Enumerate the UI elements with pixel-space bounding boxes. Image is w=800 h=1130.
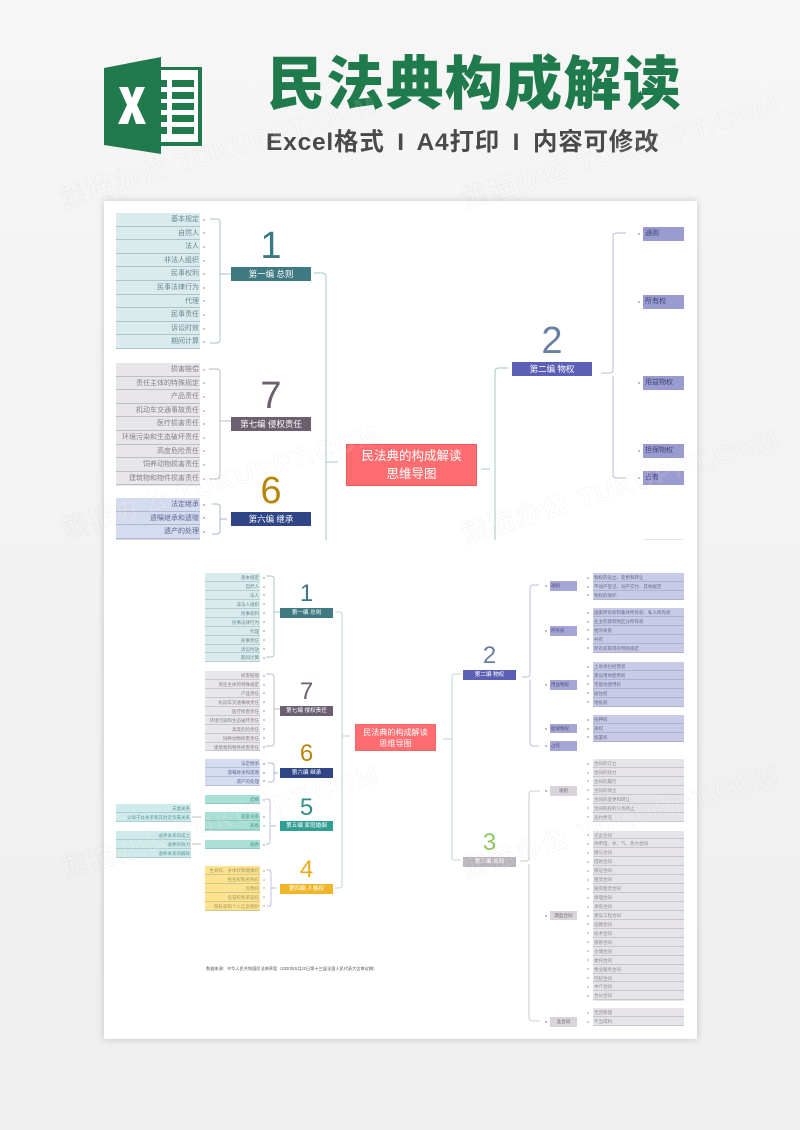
- upper property sub-topics: [638, 227, 684, 485]
- list: security: 质权: [594, 726, 603, 731]
- list: typical contracts: 保理合同: [594, 895, 612, 900]
- list: security: 抵押权: [594, 717, 608, 722]
- list: adoption detail: 收养关系的解除: [158, 851, 190, 856]
- list: usufruct: 建设用地使用权: [594, 673, 626, 678]
- list: upper general provisions: 民事权利: [171, 270, 199, 277]
- list: family relations and divorce: [205, 812, 260, 831]
- list: upper general provisions: 民事法律行为: [157, 284, 199, 291]
- sub-topic: general: [550, 581, 577, 590]
- sub-topic: contract general: [550, 786, 577, 796]
- sub-topic: security: [643, 444, 684, 458]
- list: upper general provisions: 非法人组织: [164, 257, 199, 264]
- heading: book four: 第四编 人格权: [289, 886, 324, 892]
- list: typical contracts: 行纪合同: [594, 976, 612, 980]
- list: lower tort liability: [205, 671, 260, 751]
- sub-topic: security: 担保物权: [551, 726, 569, 730]
- heading: lower book seven: [280, 706, 333, 716]
- list: ownership: 共有: [594, 637, 603, 642]
- list: contract general: 合同的变更和转让: [594, 797, 630, 802]
- heading: lower book seven: 第七编 侵权责任: [286, 708, 327, 714]
- list: contract general: 合同的订立: [594, 761, 616, 766]
- sub-topic: ownership: [643, 295, 684, 309]
- list: family relations and divorce: 家庭关系: [241, 814, 259, 819]
- list: contract general: 违约责任: [594, 815, 612, 820]
- list: security: [593, 715, 684, 742]
- heading: book five: 第五编 家庭婚姻: [286, 823, 327, 829]
- list: lower general provisions: 民事法律行为: [232, 620, 259, 625]
- lower property sub-topics: [545, 581, 577, 751]
- list: adoption detail: [116, 831, 191, 858]
- list: property general: 不动产登记、动产交付、其他规定: [594, 584, 662, 589]
- list: upper tort liability: [116, 363, 200, 486]
- sub-topic: possession: 占有: [551, 743, 560, 748]
- list: contract general: 合同的权利义务终止: [594, 806, 634, 811]
- list: upper general provisions: 基本规定: [171, 216, 199, 223]
- list: lower general provisions: 自然人: [246, 584, 259, 589]
- number 4: 4: [300, 856, 313, 883]
- list: upper tort liability: 饲养动物损害责任: [143, 461, 199, 468]
- heading: lower book two: 第二编 物权: [475, 672, 504, 678]
- sub-topic: possession: [643, 471, 684, 485]
- list: ownership: 国家所有权和集体所有权、私人所有权: [594, 610, 670, 615]
- list: ownership: [593, 608, 684, 653]
- list: typical contracts: 建设工程合同: [594, 913, 621, 918]
- list: contract general: [593, 759, 684, 822]
- source note: 数据来源：中华人民共和国民法典草案（2020年5月22日第十三届全国人民代表大会审议稿）: [206, 966, 377, 971]
- list: personality rights: 肖像权: [246, 886, 259, 891]
- list: lower general provisions: 期间计算: [241, 655, 259, 660]
- watermarks: 熊猫办公 TUKUPPT.COM: [58, 759, 383, 884]
- list: lower tort liability: 医疗损害责任: [232, 709, 259, 714]
- list: ownership: 所有权取得的特别规定: [594, 646, 639, 651]
- sub-topic: contract general: 通则: [559, 788, 568, 793]
- list: family relations and divorce: 离婚: [250, 823, 259, 828]
- list: typical contracts: 保证合同: [594, 868, 612, 873]
- list: upper tort liability: 责任主体的特殊规定: [136, 380, 199, 387]
- list: contract general: 合同的效力: [594, 770, 616, 775]
- number 7: 7: [260, 375, 282, 417]
- list: upper tort liability: 机动车交通事故责任: [136, 407, 199, 414]
- list: usufruct: [593, 662, 684, 707]
- list: upper succession: [116, 498, 200, 540]
- list: personality rights: 生命权、身体权和健康权: [210, 868, 259, 873]
- heading: book seven: [231, 417, 311, 431]
- sub-topic: usufruct: [550, 680, 577, 690]
- list: upper succession: 法定继承: [171, 501, 199, 508]
- list: personality rights: 姓名权和名称权: [228, 877, 259, 882]
- list: upper tort liability: 医疗损害责任: [157, 420, 199, 427]
- lower map trunk connectors: [335, 612, 461, 888]
- heading: book one: 第一编 总则: [249, 269, 293, 279]
- list: typical contracts: 合伙合同: [594, 993, 612, 998]
- list: upper tort liability: 环境污染和生态破坏责任: [122, 434, 199, 441]
- heading: book three: 第三编 合同: [475, 859, 504, 865]
- list: security: 留置权: [594, 735, 608, 740]
- list: lower general provisions: [205, 573, 260, 662]
- list: adoption: [205, 840, 260, 849]
- list: lower succession: 遗嘱继承和遗赠: [228, 770, 259, 775]
- list: lower tort liability: 饲养动物损害责任: [223, 736, 259, 741]
- list: upper general provisions: 法人: [185, 243, 199, 250]
- list: contract general: 合同的保全: [594, 788, 616, 793]
- sub-topic: usufruct: [643, 376, 684, 390]
- list: upper general provisions: 期间计算: [171, 338, 199, 345]
- watermarks: 熊猫办公 TUKUPPT.COM: [458, 759, 783, 884]
- list: personality rights: 隐私权和个人信息保护: [214, 904, 259, 909]
- sub-topic: possession: 占有: [645, 474, 659, 481]
- list: personality rights: [205, 866, 260, 911]
- sub-topic: typical contracts: [550, 910, 577, 920]
- heading: book three: [463, 857, 516, 866]
- central topic upper: 民法典的构成解读: [361, 449, 462, 463]
- list: lower general provisions: 非法人组织: [236, 602, 259, 607]
- list: ownership: 业主的建筑物区分所有权: [594, 619, 644, 624]
- title: 民法典构成解读: [267, 52, 682, 117]
- sub-topic: quasi contracts: 准合同: [557, 1019, 570, 1024]
- subtitle: Excel格式 I A4打印 I 内容可修改: [266, 129, 659, 156]
- number 6: 6: [260, 470, 282, 512]
- list: usufruct: 土地承包经营权: [594, 664, 626, 669]
- list: upper general provisions: 代理: [185, 298, 199, 305]
- list: adoption: 收养: [250, 842, 259, 847]
- list: upper tort liability: 高度危险责任: [157, 448, 199, 455]
- list: adoption detail: 收养的效力: [168, 842, 190, 847]
- central topic lower: [355, 724, 436, 751]
- list: lower tort liability: 产品责任: [241, 691, 259, 696]
- number 2: 2: [541, 320, 563, 362]
- heading: book one: [231, 267, 311, 281]
- list: lower succession: [205, 759, 260, 786]
- list: lower general provisions: 诉讼时效: [241, 646, 259, 652]
- list: quasi contracts: 不当得利: [594, 1019, 612, 1024]
- list: lower general provisions: 民事权利: [241, 611, 259, 616]
- sub-topic: possession: [550, 741, 577, 750]
- list: typical contracts: 买卖合同: [594, 832, 612, 838]
- list: usufruct: 地役权: [594, 700, 608, 705]
- heading: book six: [231, 512, 311, 526]
- list: typical contracts: 中介合同: [594, 984, 612, 989]
- list: marriage: [205, 795, 260, 804]
- list: typical contracts: [593, 830, 684, 1000]
- list: upper succession: 遗产的处理: [164, 528, 199, 535]
- list: personality rights: 名誉权和荣誉权: [228, 895, 259, 900]
- list: upper general provisions: 诉讼时效: [171, 325, 199, 332]
- central topic upper: 思维导图: [386, 467, 436, 481]
- divider stub upper: [643, 539, 684, 540]
- list: typical contracts: 委托合同: [594, 958, 612, 963]
- heading: lower book six: 第六编 继承: [292, 770, 321, 776]
- sub-topic: ownership: [550, 626, 577, 636]
- list: typical contracts: 融资租赁合同: [594, 886, 621, 891]
- central topic lower: 思维导图: [379, 739, 412, 748]
- heading: lower book one: 第一编 总则: [292, 610, 321, 616]
- list: marriage: 结婚: [250, 797, 259, 802]
- list: usufruct: 居住权: [594, 691, 608, 696]
- sub-topic: usufruct: 用益物权: [645, 379, 673, 386]
- list: typical contracts: 赠与合同: [594, 850, 612, 855]
- list: lower tort liability: 建筑物和物件损害责任: [214, 744, 259, 750]
- sub-topic: usufruct: 用益物权: [551, 682, 569, 687]
- list: lower general provisions: 法人: [250, 593, 259, 598]
- upper map trunk connectors: [314, 273, 508, 540]
- number 3: 3: [483, 829, 496, 856]
- list: upper general provisions: 自然人: [178, 230, 199, 237]
- number 7 lower: 7: [300, 678, 313, 705]
- sub-topic: general: 通则: [551, 583, 560, 588]
- list: lower succession: 法定继承: [241, 761, 259, 766]
- list: upper succession: 遗嘱继承和遗赠: [150, 515, 199, 522]
- list: typical contracts: 租赁合同: [594, 877, 612, 882]
- heading: lower book one: [280, 608, 333, 618]
- heading: lower book two: [463, 670, 516, 680]
- watermarks: 熊猫办公 TUKUPPT.COM: [56, 89, 381, 214]
- list: family relations detail: 父母子女关系和其他近亲属关系: [127, 815, 190, 820]
- heading: book five: [280, 821, 333, 830]
- list: quasi contracts: 无因管理: [594, 1010, 612, 1015]
- list: upper tort liability: 产品责任: [171, 393, 199, 400]
- list: usufruct: 宅基地使用权: [594, 682, 621, 687]
- sub-topic: quasi contracts: [550, 1017, 577, 1026]
- list: typical contracts: 供用电、水、气、热力合同: [594, 841, 648, 846]
- heading: book two: 第二编 物权: [530, 364, 574, 374]
- list: lower tort liability: 损害赔偿: [241, 673, 259, 678]
- list: lower tort liability: 责任主体的特殊规定: [218, 682, 259, 687]
- lower map branch brackets: [192, 576, 540, 1021]
- list: property general: [593, 573, 684, 600]
- list: upper general provisions: [116, 213, 200, 349]
- sub-topic: general: 通则: [645, 230, 659, 237]
- number 6 lower: 6: [300, 740, 313, 767]
- number 2 lower: 2: [483, 642, 496, 669]
- heading: lower book six: [280, 768, 333, 778]
- list: lower tort liability: 机动车交通事故责任: [218, 700, 259, 705]
- list: typical contracts: 借款合同: [594, 859, 612, 864]
- list: typical contracts: 承揽合同: [594, 904, 612, 909]
- sub-topic: typical contracts: 典型合同: [554, 912, 572, 918]
- panel: white sheet: [104, 201, 697, 1039]
- number 5: 5: [300, 794, 313, 821]
- list: typical contracts: 技术合同: [594, 931, 612, 936]
- watermarks: 熊猫办公 TUKUPPT.COM: [58, 419, 383, 544]
- heading: book seven: 第七编 侵权责任: [240, 419, 302, 429]
- list: contract general: 合同的履行: [594, 779, 616, 784]
- central topic upper: [346, 444, 477, 486]
- list: lower tort liability: 环境污染和生态破坏责任: [210, 718, 259, 723]
- list: lower general provisions: 民事责任: [241, 638, 259, 643]
- sub-topic: security: 担保物权: [645, 447, 673, 454]
- sub-topic: ownership: 所有权: [551, 628, 564, 633]
- list: family relations detail: 夫妻关系: [172, 806, 190, 811]
- heading: book six: 第六编 继承: [249, 514, 293, 524]
- heading: book two: [512, 362, 592, 376]
- list: upper tort liability: 损害赔偿: [171, 366, 199, 373]
- list: typical contracts: 保管合同: [594, 940, 612, 945]
- list: lower tort liability: 高度危险责任: [232, 727, 259, 732]
- number 1: 1: [260, 225, 282, 267]
- sub-topic: security: [550, 724, 577, 733]
- list: family relations detail: [116, 804, 191, 822]
- heading: book four: [280, 884, 333, 894]
- list: typical contracts: 物业服务合同: [594, 967, 621, 972]
- central topic lower: 民法典的构成解读: [363, 728, 428, 736]
- list: typical contracts: 仓储合同: [594, 949, 612, 954]
- sub-topic: general: [643, 227, 684, 241]
- list: lower general provisions: 基本规定: [241, 575, 259, 580]
- list: property general: 物权的设立、变更和转让: [594, 575, 644, 580]
- sub-topic: ownership: 所有权: [645, 298, 666, 305]
- number 1 lower: 1: [300, 580, 313, 607]
- list: upper tort liability: 建筑物和物件损害责任: [129, 475, 199, 482]
- watermarks: 熊猫办公 TUKUPPT.COM: [458, 424, 783, 549]
- list: upper general provisions: 民事责任: [171, 311, 199, 318]
- list: lower succession: 遗产的处理: [236, 779, 259, 784]
- list: lower general provisions: 代理: [250, 629, 259, 634]
- list: typical contracts: 运输合同: [594, 922, 612, 927]
- list: quasi contracts: [593, 1008, 684, 1026]
- icon: Excel logo: [104, 57, 202, 154]
- upper map branch brackets: [209, 219, 626, 534]
- watermarks: 熊猫办公 TUKUPPT.COM: [458, 89, 783, 214]
- list: property general: 物权的保护: [594, 593, 616, 598]
- list: adoption detail: 收养关系的成立: [158, 833, 190, 838]
- list: ownership: 相邻关系: [594, 628, 612, 633]
